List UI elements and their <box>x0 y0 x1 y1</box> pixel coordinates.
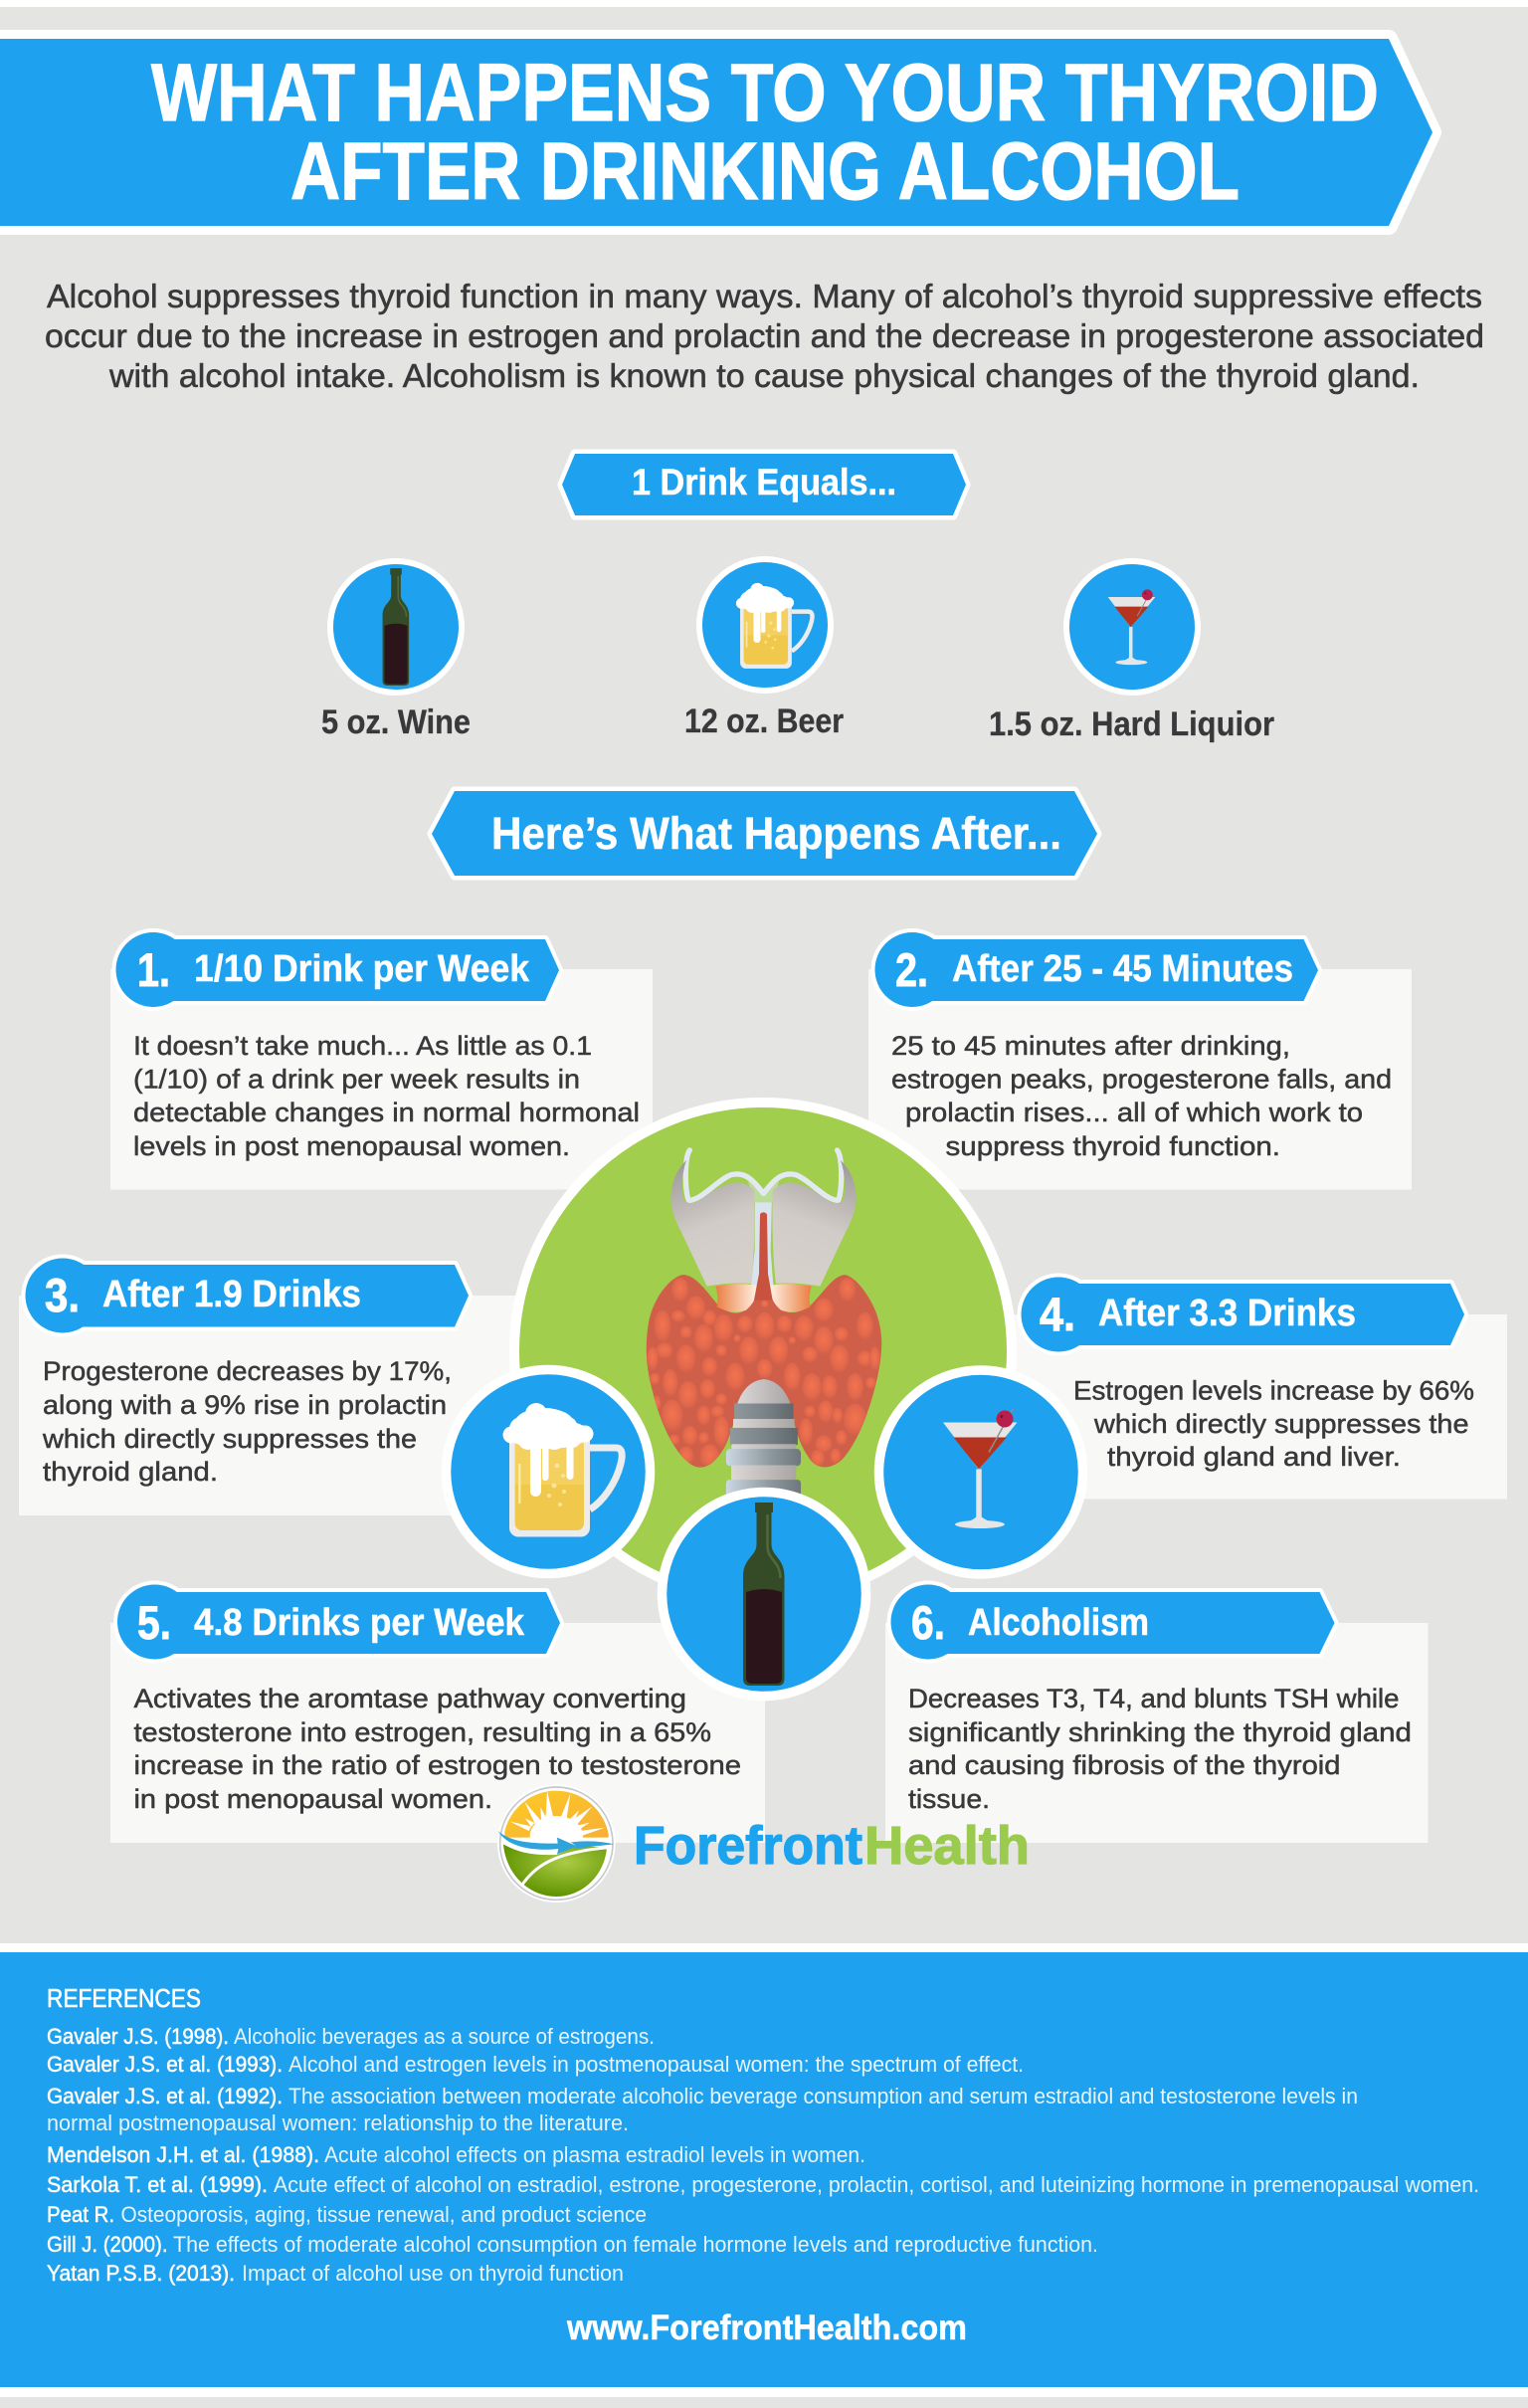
references heading: REFERENCES <box>47 1983 201 2013</box>
reference list: Gill J. (2000). <box>47 2232 167 2257</box>
panel 1: 1/10 drink per week: 1/10 Drink per Week <box>194 948 530 990</box>
intro text: Alcohol suppresses thyroid function in many ways. Many of alcohol’s thyroid suppressive effects <box>47 278 1482 314</box>
thyroid illustration <box>647 1150 881 1499</box>
panel 3: after 1.9 drinks <box>19 1258 561 1515</box>
reference list: Alcoholic beverages as a source of estrogens. <box>234 2024 655 2049</box>
heading: what happens after <box>432 791 1097 876</box>
reference list: Mendelson J.H. et al. (1988). <box>47 2142 319 2167</box>
panel 5: 4.8 drinks per week: testosterone into estrogen, resulting in a 65% <box>133 1717 711 1747</box>
panel 5: 4.8 drinks per week: 4.8 Drinks per Week <box>194 1602 525 1644</box>
panel 4: after 3.3 drinks <box>995 1278 1507 1499</box>
reference list: Gavaler J.S. et al. (1993). <box>47 2052 283 2077</box>
panel 2: after 25-45 minutes: suppress thyroid function. <box>945 1131 1280 1161</box>
panel 3: after 1.9 drinks: which directly suppresses the <box>42 1424 417 1454</box>
panel 6: alcoholism: tissue. <box>908 1784 990 1814</box>
reference list: Gavaler J.S. (1998). <box>47 2024 229 2049</box>
reference list: Peat R. <box>47 2202 114 2227</box>
circle: cocktail <box>879 1370 1082 1574</box>
panel 2: after 25-45 minutes: 2. <box>895 943 928 996</box>
panel 5: 4.8 drinks per week: Activates the aromtase pathway converting <box>133 1684 686 1713</box>
reference list: normal postmenopausal women: relationship to the literature. <box>47 2110 629 2135</box>
reference list: The effects of moderate alcohol consumption on female hormone levels and reproductive function. <box>173 2232 1098 2257</box>
trachea <box>726 1379 801 1499</box>
panel 6: alcoholism: Decreases T3, T4, and blunts TSH while <box>908 1684 1399 1713</box>
drink: wine: 5 oz. Wine <box>321 703 471 741</box>
panel 6: alcoholism: significantly shrinking the thyroid gland <box>908 1717 1412 1747</box>
heading: 1 drink equals: 1 Drink Equals... <box>632 462 896 502</box>
reference list: Sarkola T. et al. (1999). <box>47 2172 268 2197</box>
reference list: Alcohol and estrogen levels in postmenopausal women: the spectrum of effect. <box>288 2052 1024 2077</box>
cartilage and parathyroid pieces <box>670 1150 857 1312</box>
panel 6: alcoholism: 6. <box>911 1596 945 1649</box>
panel 3: after 1.9 drinks: thyroid gland. <box>43 1457 218 1487</box>
panel 6: alcoholism <box>885 1584 1429 1843</box>
panel 4: after 3.3 drinks: After 3.3 Drinks <box>1098 1293 1356 1334</box>
logo wordmark: Health <box>864 1816 1030 1876</box>
panel 1: 1/10 drink per week: levels in post menopausal women. <box>133 1131 570 1161</box>
panel 3: after 1.9 drinks: Progesterone decreases by 17%, <box>43 1356 452 1386</box>
panel 2: after 25-45 minutes: prolactin rises... all of which work to <box>905 1098 1363 1127</box>
drink: hard liquor: 1.5 oz. Hard Liquior <box>989 705 1274 743</box>
drink: beer: 12 oz. Beer <box>684 702 844 740</box>
references section <box>0 1943 1528 2408</box>
panel 4: after 3.3 drinks: which directly suppresses the <box>1093 1409 1468 1439</box>
logo emblem <box>497 1784 616 1903</box>
panel 1: 1/10 drink per week: 1. <box>137 943 170 996</box>
heading: 1 drink equals <box>562 454 966 515</box>
panel 1: 1/10 drink per week <box>110 932 653 1190</box>
logo wordmark <box>634 1816 1030 1876</box>
panel 1: 1/10 drink per week: It doesn’t take much... As little as 0.1 <box>133 1031 592 1061</box>
panel 5: 4.8 drinks per week: in post menopausal women. <box>133 1784 492 1814</box>
panel 6: alcoholism: Alcoholism <box>968 1602 1149 1644</box>
panel 2: after 25-45 minutes: estrogen peaks, progesterone falls, and <box>891 1065 1392 1095</box>
logo: Forefront Health <box>497 1784 1030 1903</box>
panel 1: 1/10 drink per week: (1/10) of a drink per week results in <box>133 1065 580 1095</box>
panel 5: 4.8 drinks per week: increase in the ratio of estrogen to testosterone <box>133 1750 741 1780</box>
panel 3: after 1.9 drinks: along with a 9% rise in prolactin <box>43 1390 447 1420</box>
panel 4: after 3.3 drinks: thyroid gland and liver. <box>1107 1442 1401 1472</box>
reference list: Impact of alcohol use on thyroid function <box>242 2261 624 2286</box>
central green circle <box>514 1103 1012 1600</box>
drink: wine <box>321 561 471 741</box>
logo wordmark: Forefront <box>634 1816 862 1876</box>
drink: hard liquor <box>989 561 1274 743</box>
reference list: Yatan P.S.B. (2013). <box>47 2261 235 2286</box>
panel 1: 1/10 drink per week: detectable changes in normal hormonal <box>133 1098 640 1127</box>
panel 2: after 25-45 minutes: 25 to 45 minutes after drinking, <box>891 1031 1290 1061</box>
intro text <box>45 278 1484 394</box>
title banner <box>0 39 1432 226</box>
panel 3: after 1.9 drinks: After 1.9 Drinks <box>102 1274 361 1315</box>
panel 4: after 3.3 drinks: 4. <box>1040 1288 1075 1340</box>
drink: beer <box>684 559 844 740</box>
panel 5: 4.8 drinks per week: 5. <box>137 1596 171 1649</box>
panel 3: after 1.9 drinks: 3. <box>45 1269 80 1321</box>
reference list: Acute alcohol effects on plasma estradiol levels in women. <box>324 2142 865 2167</box>
panel 5: 4.8 drinks per week <box>110 1584 765 1843</box>
intro text: with alcohol intake. Alcoholism is known to cause physical changes of the thyroid gland. <box>108 357 1420 394</box>
reference list: Acute effect of alcohol on estradiol, estrone, progesterone, prolactin, cortisol, and luteinizing hormone in premenopausal women. <box>274 2172 1479 2197</box>
panel 2: after 25-45 minutes <box>868 932 1412 1190</box>
reference list: Osteoporosis, aging, tissue renewal, and product science <box>121 2202 647 2227</box>
panel 2: after 25-45 minutes: After 25 - 45 Minutes <box>952 948 1293 990</box>
reference list: The association between moderate alcoholic beverage consumption and serum estradiol and testosterone levels in <box>288 2084 1358 2108</box>
panel 4: after 3.3 drinks: Estrogen levels increase by 66% <box>1073 1375 1474 1405</box>
circle: wine <box>663 1493 865 1696</box>
intro text: occur due to the increase in estrogen and prolactin and the decrease in progesterone associated <box>45 317 1484 354</box>
heading: what happens after: Here’s What Happens After... <box>491 808 1061 859</box>
thyroid lobes <box>647 1275 881 1469</box>
reference list <box>47 2024 1479 2286</box>
panel 6: alcoholism: and causing fibrosis of the thyroid <box>908 1750 1341 1780</box>
circle: beer <box>446 1369 651 1574</box>
title banner: AFTER DRINKING ALCOHOL <box>290 126 1240 217</box>
website URL: www.ForefrontHealth.com <box>566 2308 967 2347</box>
reference list: Gavaler J.S. et al. (1992). <box>47 2084 283 2108</box>
